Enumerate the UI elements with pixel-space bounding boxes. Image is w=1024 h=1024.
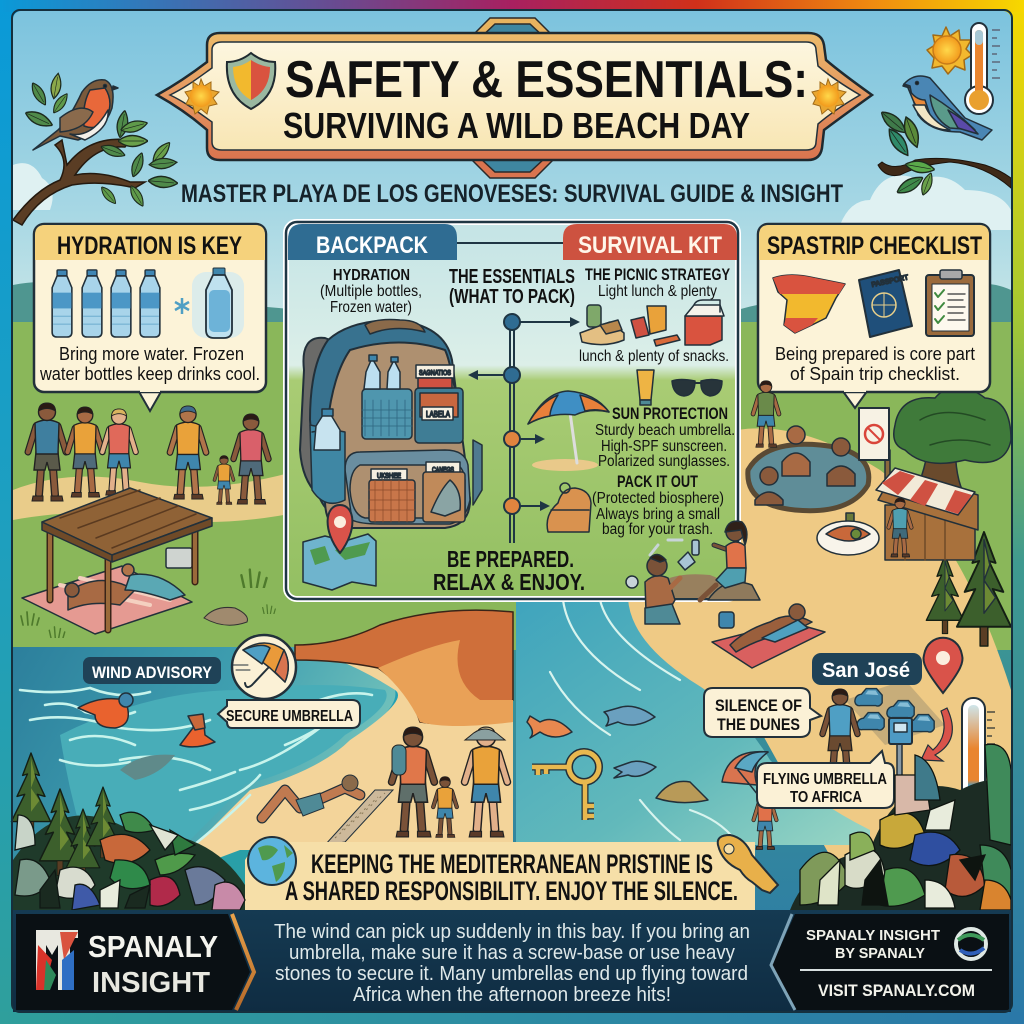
icon: picnic lunch, snacks and cooler	[580, 300, 724, 346]
checklist text	[775, 344, 975, 384]
title plaque	[157, 18, 872, 178]
right bird on branch	[878, 76, 1011, 197]
sand footpath left	[13, 470, 300, 522]
beach kiosk with awning	[876, 468, 978, 560]
flying umbrella callout: TO AFRICA	[790, 789, 862, 806]
icon: robin	[33, 80, 118, 150]
thermometer in foliage	[956, 698, 995, 847]
silence of the dunes callout: SILENCE OF	[715, 696, 802, 715]
pack it out text: PACK IT OUT	[617, 473, 698, 491]
brand block	[16, 914, 254, 1010]
brand tag: INSIGHT	[92, 967, 210, 999]
message text	[285, 849, 738, 906]
insight paragraph	[274, 920, 750, 1006]
left sea turquoise shallows	[60, 685, 387, 875]
sun protection text: High-SPF sunscreen.	[601, 438, 727, 455]
wind advisory callout: WIND ADVISORY	[92, 663, 213, 682]
right foliage cluster	[790, 744, 1011, 910]
title line two: SURVIVING A WILD BEACH DAY	[283, 105, 750, 146]
right sea foam	[550, 600, 735, 840]
pack it out text: Always bring a small	[596, 506, 720, 523]
food plate and drinks	[817, 513, 879, 555]
San José location label: San José	[822, 659, 910, 682]
icon: sunscreen and sunglasses	[637, 370, 722, 405]
San José location label	[812, 653, 922, 685]
backpack illustration: SAGNATIOS	[419, 370, 451, 377]
icon: passport: PASSPORT	[871, 274, 910, 289]
parking sign	[889, 718, 912, 777]
brand name: SPANALY	[88, 929, 218, 964]
silence of the dunes callout	[704, 688, 821, 737]
icon: frozen bottle	[192, 268, 244, 338]
icon: small trash bag	[547, 483, 591, 532]
left sea foam waves	[20, 688, 372, 860]
no-swimming sign	[859, 408, 890, 500]
picnic strategy text: lunch & plenty of snacks.	[579, 348, 729, 365]
hydration heading: HYDRATION IS KEY	[57, 232, 242, 260]
connector between tabs	[457, 242, 563, 244]
sun protection text: SUN PROTECTION	[612, 405, 728, 423]
person walking with flying umbrella	[722, 752, 776, 849]
secure umbrella callout	[218, 700, 360, 728]
large tree on the right	[894, 386, 1011, 646]
checklist panel	[758, 224, 990, 408]
backpack illustration	[300, 320, 482, 528]
swimmers in the sea	[78, 693, 215, 780]
right sea	[516, 598, 870, 845]
grass meadow	[13, 322, 1011, 650]
left bird on branch	[13, 73, 178, 225]
sky background	[13, 11, 1011, 341]
meadow rocks and grass tufts	[21, 570, 275, 638]
left pine trees and flowering foliage	[11, 753, 245, 912]
plaque inner	[170, 42, 860, 150]
footer bar	[13, 910, 1011, 1012]
hydration note: Frozen water)	[330, 299, 412, 316]
hydration text	[39, 344, 260, 384]
backpack tab heading: BACKPACK	[316, 232, 429, 259]
icon: water bottles	[52, 270, 160, 337]
icon: golden key	[718, 835, 778, 893]
credit block: BY SPANALY	[835, 945, 925, 962]
message text: KEEPING THE MEDITERRANEAN PRISTINE IS	[311, 849, 713, 879]
walker on the dunes	[823, 689, 857, 779]
icon: passport	[859, 270, 912, 337]
picnic strategy text: Light lunch & plenty	[598, 283, 717, 300]
wind advisory callout	[83, 657, 221, 684]
sunbather reclining on the sand	[262, 775, 393, 845]
plaque frame	[157, 33, 872, 160]
left beach sand	[160, 648, 513, 880]
parking area with blue cars	[845, 680, 945, 745]
insight paragraph: Africa when the afternoon breeze hits!	[353, 983, 671, 1006]
clouds	[13, 163, 1011, 230]
panel: backpack survival kit	[286, 222, 738, 599]
right beach and sand trail	[610, 428, 1011, 910]
hydration text: water bottles keep drinks cool.	[39, 364, 260, 384]
backpack illustration: LABELA	[426, 410, 451, 419]
closing message	[433, 546, 585, 595]
hydration text: Bring more water. Frozen	[59, 344, 244, 364]
backpack illustration: CANEGS	[432, 467, 454, 474]
pack it out text: (Protected biosphere)	[592, 490, 724, 507]
insight paragraph: stones to secure it. Many umbrellas end up flying toward	[275, 962, 748, 985]
picnic strategy text: THE PICNIC STRATEGY	[585, 266, 730, 284]
icon: bluebird	[903, 76, 992, 140]
litter on the rock	[626, 540, 737, 598]
closing message: RELAX & ENJOY.	[433, 569, 585, 595]
icon: thermometer top right	[965, 23, 1000, 114]
essentials heading	[449, 266, 575, 308]
sunbathers on towel	[712, 604, 825, 668]
pack it out text: bag for your trash.	[602, 521, 713, 538]
sitting woman on rock	[700, 521, 760, 600]
plaque medallions	[470, 18, 555, 178]
icon: left sun	[185, 79, 219, 114]
golden key in water	[532, 752, 599, 820]
icon: beach umbrella	[528, 391, 609, 471]
hot spring pool with bathers	[748, 426, 869, 511]
secure umbrella callout: SECURE UMBRELLA	[226, 708, 353, 725]
fish and rock in right sea	[527, 706, 708, 803]
icon: snowflake	[175, 298, 189, 314]
flying umbrella callout	[757, 751, 894, 808]
distant hills	[13, 282, 1011, 345]
checklist text: Being prepared is core part	[775, 344, 975, 364]
silence of the dunes callout: THE DUNES	[717, 715, 800, 734]
icon: shield	[227, 53, 275, 109]
icon: map with location pin	[303, 505, 376, 590]
icon: brand logo	[36, 930, 78, 990]
hydration heading	[35, 225, 265, 260]
insight paragraph: umbrella, make sure it has a screw-base or use heavy	[289, 941, 736, 964]
hydration note	[320, 267, 422, 316]
left hikers group	[28, 403, 268, 504]
left sea	[13, 647, 395, 912]
sun protection text	[595, 405, 735, 470]
backpack illustration: UKSHEE	[377, 473, 401, 480]
hydration note: HYDRATION	[333, 267, 410, 284]
sun protection text: Polarized sunglasses.	[598, 453, 730, 470]
icon: wind umbrella badge	[232, 635, 296, 699]
icon: sun top right	[927, 27, 972, 74]
hiker above the hot spring	[753, 381, 779, 447]
essentials heading: THE ESSENTIALS	[449, 266, 575, 288]
message banner	[245, 835, 778, 910]
credit block: SPANALY INSIGHT	[806, 927, 940, 944]
family on the left beach	[392, 727, 507, 837]
title line one: SAFETY & ESSENTIALS:	[285, 51, 808, 109]
subtitle: MASTER PLAYA DE LOS GENOVESES: SURVIVAL GUIDE & INSIGHT	[181, 180, 843, 208]
essentials heading: (WHAT TO PACK)	[449, 286, 575, 308]
message text: A SHARED RESPONSIBILITY. ENJOY THE SILENCE.	[285, 876, 738, 906]
red curved arrow	[921, 708, 952, 761]
icon: location pin	[923, 638, 963, 693]
checklist text: of Spain trip checklist.	[790, 364, 960, 384]
flying umbrella callout: FLYING UMBRELLA	[763, 771, 887, 788]
closing message: BE PREPARED.	[447, 546, 574, 572]
kneeling man with litter	[645, 554, 680, 624]
credit block	[771, 914, 1009, 1010]
icon: map of Spain	[773, 275, 845, 333]
orange dunes	[295, 610, 513, 726]
essentials timeline with arrows	[468, 314, 580, 543]
icon: right sun	[812, 79, 846, 114]
survival kit tab heading	[563, 224, 737, 260]
insight paragraph: The wind can pick up suddenly in this bay. If you bring an	[274, 920, 750, 943]
icon: globe	[248, 837, 296, 885]
survival kit tab heading: SURVIVAL KIT	[578, 232, 722, 259]
hydration panel	[34, 224, 266, 411]
credit block: VISIT SPANALY.COM	[818, 981, 975, 1000]
picnic strategy text	[579, 266, 730, 365]
hydration note: (Multiple bottles,	[320, 283, 422, 300]
sun protection text: Sturdy beach umbrella.	[595, 422, 735, 439]
icon: swirl emblem	[956, 929, 986, 959]
checklist heading	[759, 225, 989, 260]
pack it out text	[592, 473, 724, 538]
backpack tab heading	[288, 224, 457, 260]
wooden shelter with resting people	[22, 488, 212, 634]
icon: clipboard checklist	[926, 270, 974, 336]
